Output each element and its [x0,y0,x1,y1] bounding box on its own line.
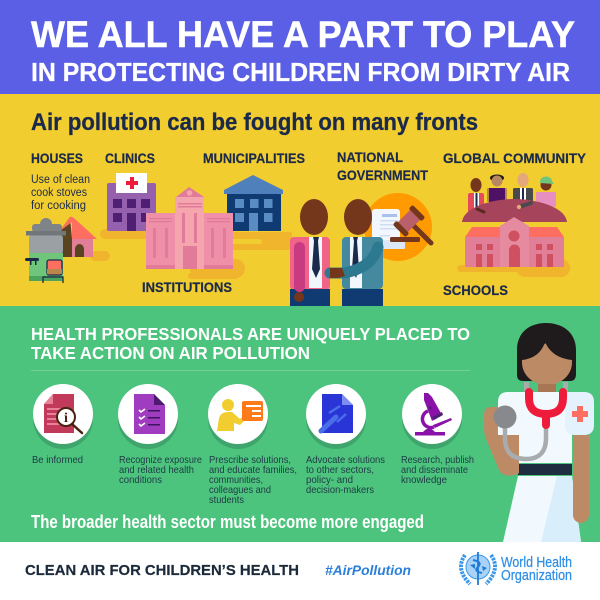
text: prescribe solutions: colleagues and [209,484,271,496]
text: recognize exposure [119,454,202,486]
icon: checklist [118,384,178,449]
heading: health professionals [31,324,470,363]
label: national government [337,149,428,183]
icon: house [60,217,97,257]
icon: be informed: i [64,411,68,426]
icon: left official [290,199,330,306]
panel: yellow fronts section [0,94,600,306]
title line 2: IN PROTECTING CHILDREN FROM DIRTY AIR [31,57,570,87]
label: schools: SCHOOLS [443,282,508,298]
illustration: nurse [484,323,594,542]
smog clouds [90,229,570,279]
text: clean cook stoves [31,174,90,212]
heading: health professionals: TAKE ACTION ON AIR POLLUTION [31,343,310,363]
text: advocate solutions: decision-makers [306,484,374,496]
logo: WHO wordmark: World Health [501,555,572,571]
text: research publish: knowledge [401,474,447,486]
footer slogan: CLEAN AIR FOR CHILDREN’S HEALTH [25,562,299,579]
icon: microscope [402,384,462,449]
heading: health professionals: HEALTH PROFESSIONALS ARE UNIQUELY PLACED TO [31,324,470,344]
icon: municipal building [224,175,283,231]
text: advocate solutions: to other sectors, [306,464,374,476]
text: advocate solutions [306,454,385,496]
icon: be informed [33,384,93,449]
text: research publish [401,454,474,486]
text: advocate solutions: policy- and [306,474,353,486]
text: clean cook stoves: for cooking [31,200,86,212]
text: prescribe solutions: students [209,494,244,506]
text: research publish: Research, publish [401,454,474,466]
text: prescribe solutions [209,454,297,506]
text: recognize exposure: and related health [119,464,194,476]
footer hashtag: #AirPollution [325,562,411,578]
icon: teacher at board [208,384,268,449]
text: prescribe solutions: and educate families, [209,464,297,476]
icon: cook stove [25,218,66,283]
icon: gavel and document [364,193,432,261]
logo: WHO emblem [461,552,495,585]
label: houses: HOUSES [31,150,83,166]
text: recognize exposure: conditions [119,474,162,486]
icon: institution building [146,187,233,269]
text: clean cook stoves: cook stoves [31,187,87,199]
label: national government: NATIONAL [337,149,403,165]
text: recognize exposure: Recognize exposure [119,454,202,466]
label: institutions: INSTITUTIONS [142,279,232,295]
icon: school [465,217,564,267]
icon: clinic [107,173,156,231]
icon: right official [330,199,383,306]
heading: many fronts: Air pollution can be fought on many fronts [31,109,478,136]
logo: WHO wordmark: Organization [501,568,572,584]
text: prescribe solutions: Prescribe solutions, [209,454,291,466]
text: clean cook stoves: Use of clean [31,174,90,186]
panel: footer [0,542,600,600]
icon: global community table [462,173,567,222]
panel: green health section [0,306,600,542]
text: advocate solutions: Advocate solutions [306,454,385,466]
title line 1: WE ALL HAVE A PART TO PLAY [31,14,575,55]
text: prescribe solutions: communities, [209,474,263,486]
callout: broader health sector: The broader health sector must become more engaged [31,511,424,532]
text: be informed: Be informed [32,454,83,466]
logo: WHO wordmark [501,555,572,584]
label: national government: GOVERNMENT [337,167,428,183]
label: municipalities: MUNICIPALITIES [203,150,305,166]
text: research publish: and disseminate [401,464,468,476]
icon: advocacy document [306,384,366,449]
panel: header banner [0,0,600,94]
label: global community: GLOBAL COMMUNITY [443,150,587,166]
label: clinics: CLINICS [105,150,155,166]
